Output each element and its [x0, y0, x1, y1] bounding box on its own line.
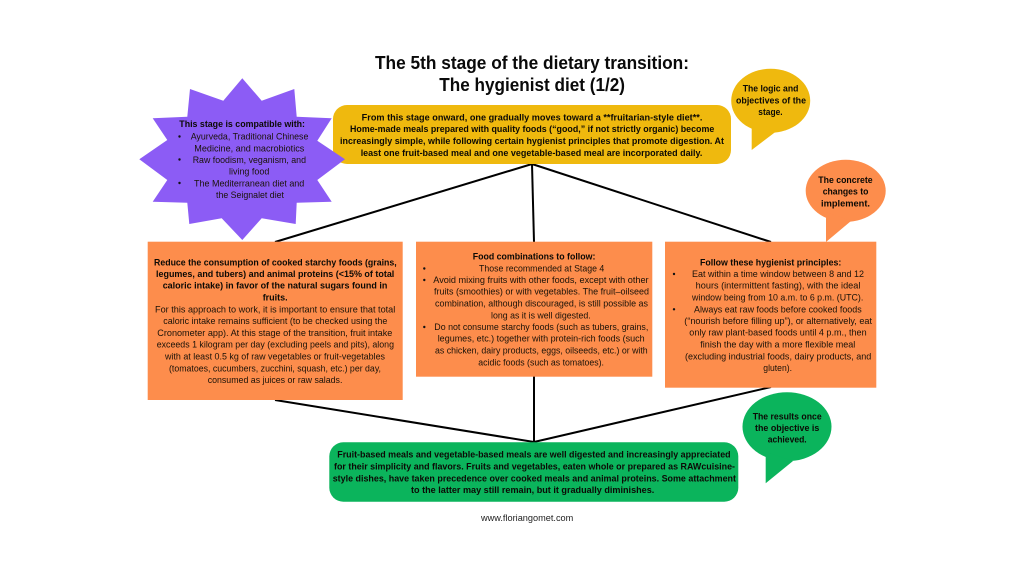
panel: reduce cooked starches and animal proteins: legumes, and tubers) and animal proteins (<15% of total [156, 269, 394, 279]
panel: hygienist principles: hours (intermittent fasting), with the ideal [696, 281, 860, 291]
callout: results once achieved: The results once [753, 411, 822, 421]
compatibility list text: Medicine, and macrobiotics [194, 143, 305, 153]
callout: logic and objectives: The logic and [743, 84, 798, 94]
callout: logic and objectives [731, 69, 810, 150]
panel: food combinations: fruits (smoothies) or with vegetables. The fruit–oilseed [434, 287, 649, 297]
compatibility list text: Raw foodism, veganism, and [193, 155, 306, 165]
panel: hygienist principles: Follow these hygienist principles: [700, 257, 841, 267]
panel: food combinations: Those recommended at Stage 4 [479, 263, 604, 273]
callout: concrete changes: implement. [821, 198, 870, 208]
panel: hygienist principles: gluten). [763, 363, 792, 373]
website credit: www.floriangomet.com [480, 513, 573, 523]
compatibility list text: This stage is compatible with: [179, 119, 305, 129]
title: The 5th stage of the dietary transition: [375, 52, 689, 73]
title: The hygienist diet (1/2) [439, 74, 625, 95]
panel: results summary: Fruit-based meals and vegetable-based meals are well digested and increasingly appreciated [337, 450, 731, 460]
panel: logic and objectives summary: least one fruit-based meal and one vegetable-based meal are incorporated daily. [361, 148, 702, 158]
panel: logic and objectives summary: From this stage onward, one gradually moves toward a **fruitarian-style diet**. [362, 112, 702, 122]
panel: reduce cooked starches and animal proteins: Cronometer app). At this stage of the transition, fruit intake [157, 328, 392, 338]
panel: hygienist principles: finish the day with a more flexible meal [700, 339, 855, 349]
callout: concrete changes: The concrete [818, 175, 873, 185]
panel: reduce cooked starches and animal proteins: fruits. [263, 293, 288, 303]
panel: food combinations: Food combinations to follow: [473, 252, 595, 262]
callout: results once achieved: achieved. [768, 435, 807, 445]
panel: hygienist principles: Always eat raw foods before cooked foods [694, 304, 862, 314]
panel: results summary: to the latter may still remain, but it gradually diminishes. [411, 485, 654, 495]
panel: food combinations: acidic foods (such as tomatoes). [478, 357, 604, 367]
panel: reduce cooked starches and animal proteins: consumed as juices or raw salads. [208, 375, 342, 385]
panel: reduce cooked starches and animal proteins: Reduce the consumption of cooked starchy foods (grains, [154, 257, 397, 267]
compatibility list text: the Seignalet diet [216, 190, 284, 200]
compatibility list text: living food [229, 167, 269, 177]
compatibility list text [178, 119, 308, 200]
callout: concrete changes [806, 160, 886, 242]
panel: reduce cooked starches and animal proteins: exceeds 1 kilogram per day (excluding peels and pits), along [157, 340, 394, 350]
connector lines: summary to the three action panels [275, 164, 771, 242]
panel: hygienist principles: only raw plant-based foods until 4 p.m., then [689, 328, 867, 338]
panel: logic and objectives summary: increasingly simple, while following certain hygienist principles that promote digestion. At [340, 136, 724, 146]
panel: food combinations [416, 242, 652, 377]
panel: compatible diets starburst [139, 78, 345, 240]
panel: hygienist principles: Eat within a time window between 8 and 12 [692, 269, 864, 279]
panel: food combinations: combination, although discouraged, is still possible as [435, 298, 648, 308]
panel: reduce cooked starches and animal proteins [148, 242, 403, 400]
panel: reduce cooked starches and animal proteins: (tomatoes, cucumbers, zucchini, squash, etc.) per day, [169, 363, 381, 373]
panel: reduce cooked starches and animal proteins: with at least 0.5 kg of raw vegetables or fruit-vegetables [164, 351, 385, 361]
starburst shape [139, 78, 345, 240]
panel: food combinations: long as it is well digested. [491, 310, 591, 320]
panel: results summary [329, 442, 738, 502]
callout: concrete changes: changes to [823, 187, 869, 197]
panel: hygienist principles: (“nourish before filling up”), or alternatively, eat [684, 316, 873, 326]
panel: food combinations: legumes, etc.) together with protein-rich foods (such [438, 334, 645, 344]
panel: food combinations: Avoid mixing fruits with other foods, except with other [433, 275, 649, 285]
panel: logic and objectives summary [333, 105, 731, 164]
title [375, 52, 689, 95]
callout: logic and objectives: stage. [758, 107, 783, 117]
connector lines: action panels to the results panel [275, 376, 771, 442]
panel: logic and objectives summary: Home-made meals prepared with quality foods (“good,” if not strictly organic) become [350, 124, 714, 134]
callout: logic and objectives: objectives of the [736, 95, 806, 105]
callout: results once achieved [742, 392, 832, 483]
panel: reduce cooked starches and animal proteins: caloric intake remains sufficient (to be checked using the [163, 316, 387, 326]
panel: hygienist principles [665, 242, 876, 388]
panel: hygienist principles: window being from 10 a.m. to 6 p.m. (UTC). [691, 293, 863, 303]
callout: results once achieved: the objective is [755, 423, 819, 433]
compatibility list text: The Mediterranean diet and [194, 178, 304, 188]
panel: food combinations: as chicken, dairy products, eggs, oilseeds, etc.) or with [435, 346, 648, 356]
panel: results summary: style dishes, have taken precedence over cooked meals and animal proteins. Some attachment [333, 473, 736, 483]
panel: food combinations: Do not consume starchy foods (such as tubers, grains, [434, 322, 648, 332]
panel: results summary: for their simplicity and flavors. Fruits and vegetables, eaten whole or prepared as RAWcuisine- [334, 462, 735, 472]
panel: reduce cooked starches and animal proteins: caloric intake) in favor of the natural sugars found in [163, 281, 387, 291]
panel: reduce cooked starches and animal proteins: For this approach to work, it is important to ensure that total [155, 304, 395, 314]
compatibility list text: Ayurveda, Traditional Chinese [191, 132, 308, 142]
panel: hygienist principles: (excluding industrial foods, dairy products, and [685, 351, 871, 361]
